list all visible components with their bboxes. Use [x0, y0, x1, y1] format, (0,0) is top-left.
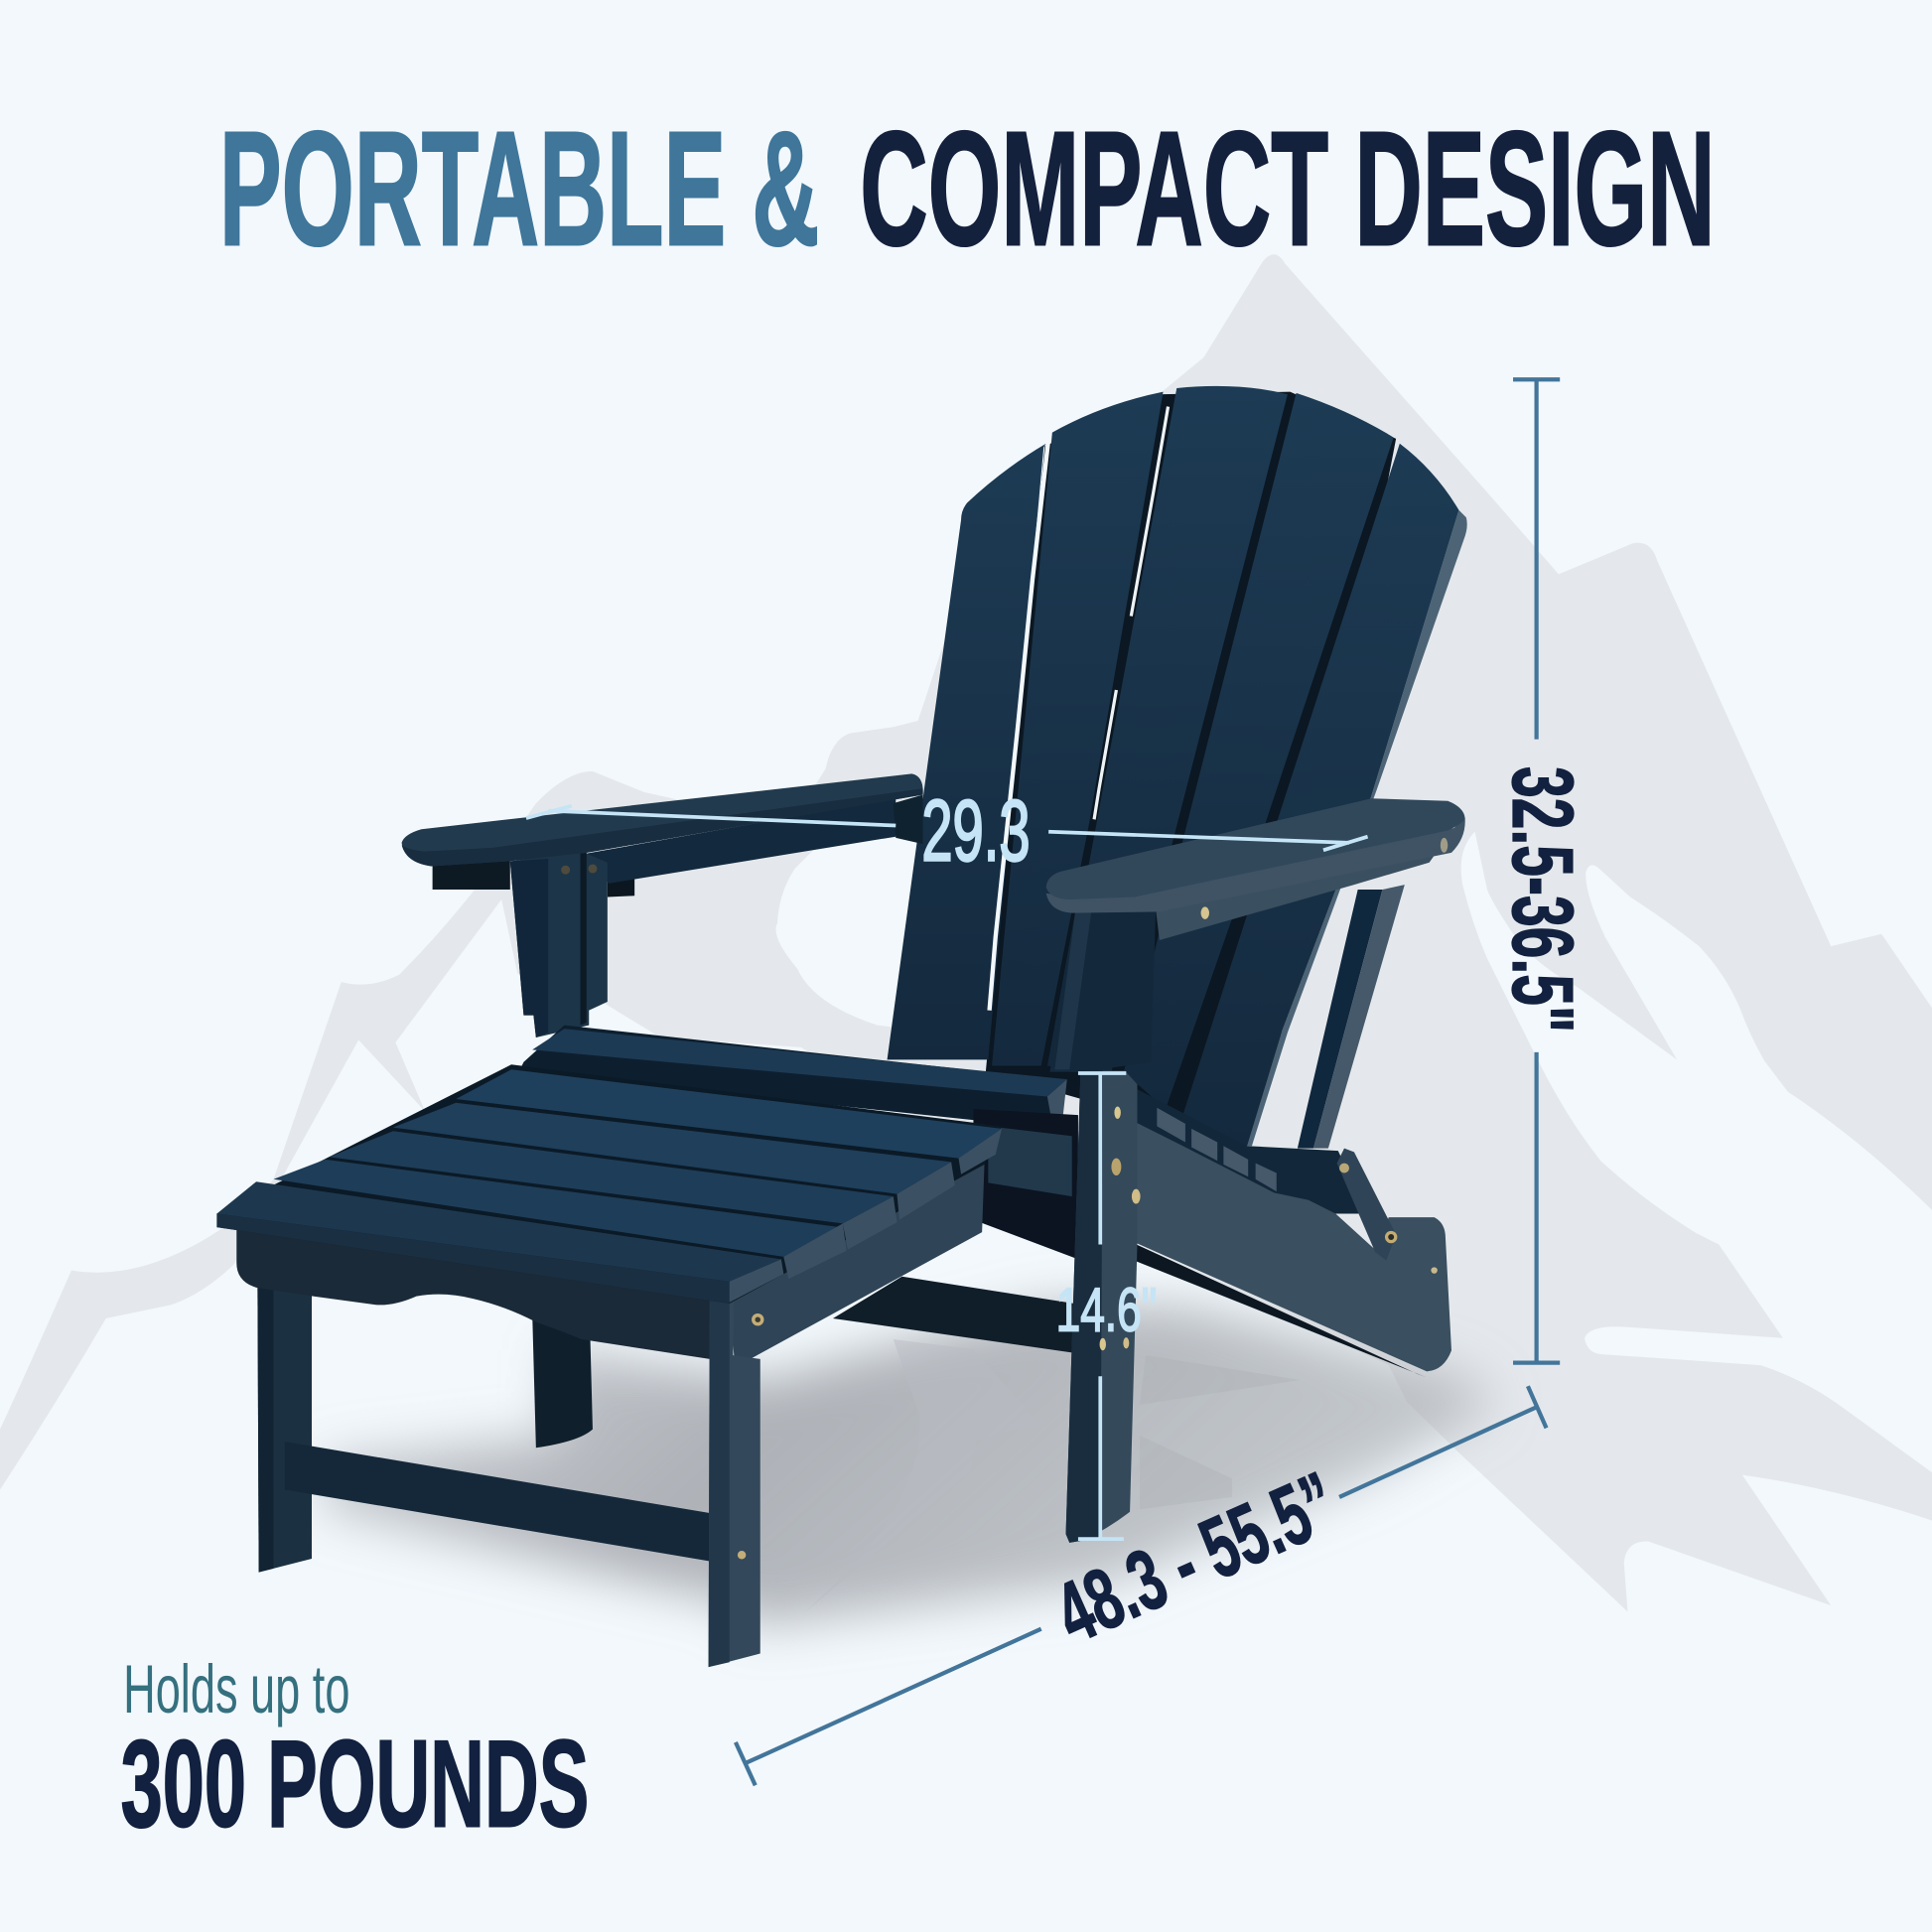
- dimension: seat height 14.6: [1056, 1073, 1157, 1539]
- title: PORTABLE &: [219, 97, 819, 279]
- far armrest: [402, 773, 923, 1037]
- dimension: height: 32.5-36.5": [1494, 766, 1590, 1033]
- front post: [1066, 1070, 1141, 1543]
- dimension: seat height 14.6: 14.6": [1056, 1276, 1157, 1344]
- dimension: length: 48.3 - 55.5”: [1041, 1453, 1351, 1662]
- chair back slats: [888, 386, 1467, 1146]
- title: [219, 97, 1716, 279]
- rear strut: [1298, 885, 1405, 1149]
- slat ends: [730, 1129, 1002, 1303]
- back leg: [532, 1313, 593, 1448]
- near armrest: [1046, 798, 1465, 1072]
- dimension: width 29.3: [526, 782, 1368, 879]
- white gaps between slats: [990, 439, 1048, 1011]
- capacity callout: [121, 1652, 589, 1853]
- dimension: length: [736, 1386, 1547, 1785]
- footrest: [216, 1064, 1002, 1667]
- stretcher: [285, 1442, 710, 1561]
- capacity callout: 300 POUNDS: [121, 1716, 589, 1853]
- chair: [216, 386, 1467, 1667]
- front right leg: [709, 1294, 760, 1667]
- seat slat: [518, 1026, 1078, 1259]
- side rail: [728, 1162, 985, 1360]
- front apron: [236, 1217, 730, 1359]
- mountain backdrop: [0, 254, 1932, 1611]
- front left leg: [257, 1282, 312, 1573]
- side rail: [1128, 1084, 1451, 1378]
- floor shadow: [323, 1307, 1497, 1626]
- top slats: [216, 1064, 1002, 1304]
- capacity callout: Holds up to: [123, 1652, 349, 1727]
- shadow streak: [806, 1339, 1038, 1611]
- dimension: width 29.3: 29.3: [921, 782, 1031, 879]
- dimension: height: [1494, 379, 1590, 1363]
- rear stretcher: [833, 1277, 1074, 1353]
